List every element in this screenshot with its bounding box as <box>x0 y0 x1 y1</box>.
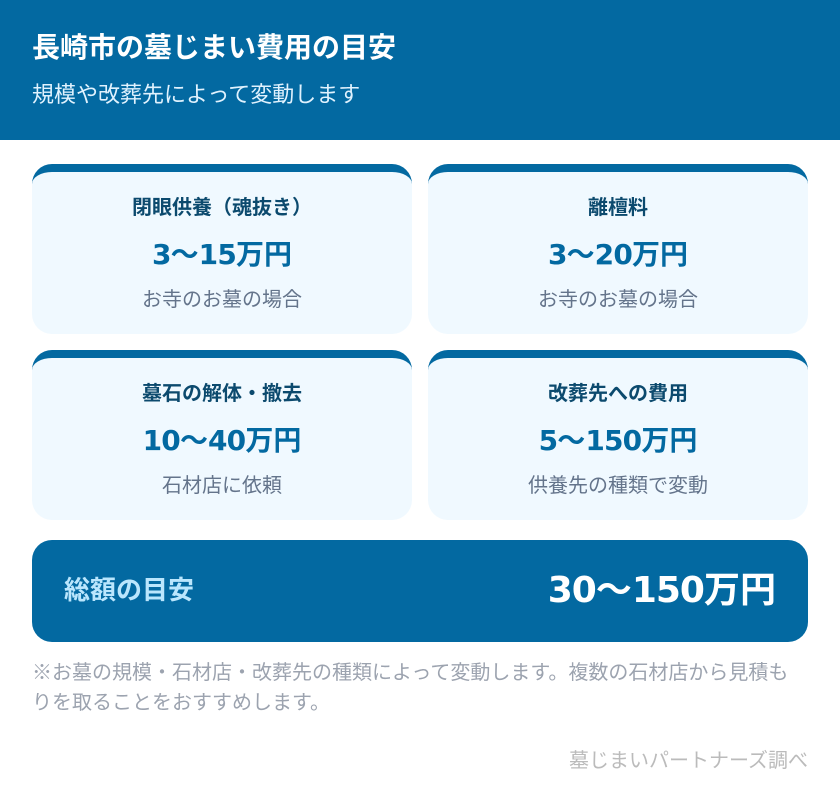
total value: 30〜150万円 <box>548 561 776 613</box>
card heading: 改葬先への費用 <box>548 383 688 405</box>
subtitle: 規模や改葬先によって変動します <box>32 82 360 107</box>
card value: 10〜40万円 <box>143 419 301 459</box>
source credit: 墓じまいパートナーズ調べ <box>569 750 808 772</box>
panel: total estimate <box>32 540 808 642</box>
card value: 3〜15万円 <box>152 233 292 273</box>
card value: 5〜150万円 <box>539 419 697 459</box>
card note: お寺のお墓の場合 <box>538 289 698 311</box>
panel: 改葬先への費用 <box>428 350 808 520</box>
card value: 3〜20万円 <box>548 233 688 273</box>
card note: 石材店に依頼 <box>162 475 282 497</box>
card heading: 墓石の解体・撤去 <box>142 383 302 405</box>
panel: 閉眼供養 <box>32 164 412 334</box>
panel: 墓石の解体・撤去 <box>32 350 412 520</box>
footnote: ※お墓の規模・石材店・改葬先の種類によって変動します。複数の石材店から見積もりを取ることをおすすめします。 <box>32 662 788 714</box>
panel: 離檀料 <box>428 164 808 334</box>
card note: お寺のお墓の場合 <box>142 289 302 311</box>
card heading: 離檀料 <box>588 197 648 219</box>
card heading: 閉眼供養（魂抜き） <box>132 197 312 219</box>
total label: 総額の目安 <box>64 575 194 605</box>
card note: 供養先の種類で変動 <box>528 475 708 497</box>
title: 長崎市の墓じまい費用の目安 <box>32 32 396 63</box>
header band <box>0 0 840 140</box>
